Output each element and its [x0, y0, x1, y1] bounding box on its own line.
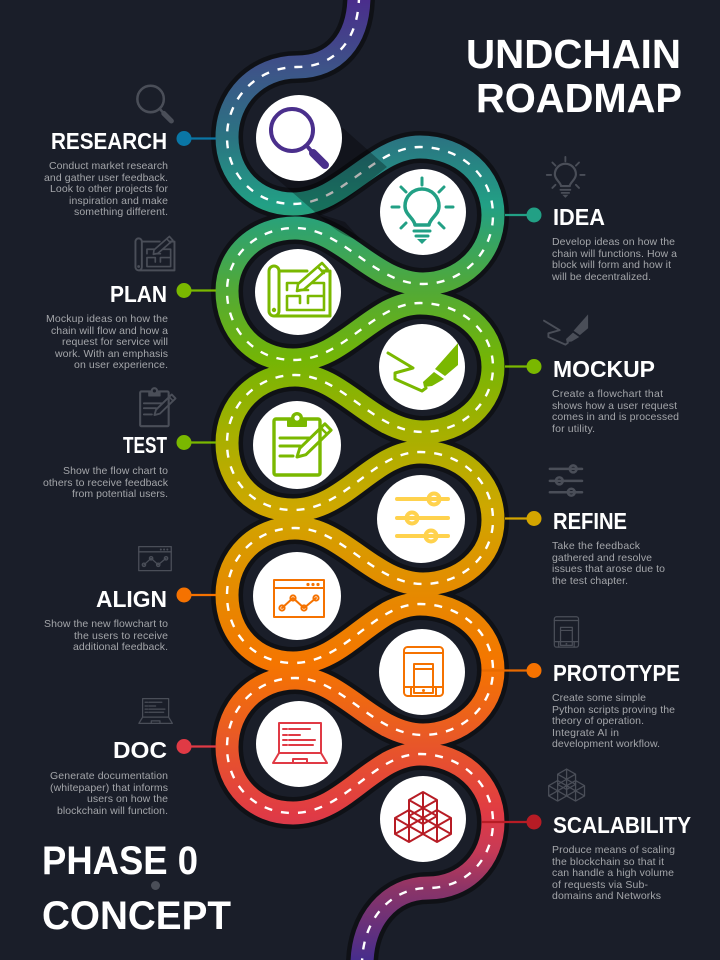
connector: align: [176, 588, 216, 602]
panel: refine: [377, 465, 665, 587]
icon: cubes in circle: [380, 776, 466, 862]
text: plan: Mockup ideas on how the: [46, 313, 168, 325]
text: refine: the test chapter.: [552, 575, 628, 587]
icon: magnifier ghost: [137, 86, 171, 121]
icon: marker ghost: [544, 314, 588, 345]
panel: prototype: [379, 617, 680, 750]
heading: plan: PLAN: [110, 281, 167, 307]
text: scalability: of requests via Sub-: [552, 879, 648, 891]
icon: blueprint ghost: [135, 236, 174, 270]
connector: test: [176, 435, 216, 450]
text: refine: gathered and resolve: [552, 552, 652, 564]
icon: blueprint in circle: [255, 249, 341, 335]
text: doc: [50, 770, 168, 817]
panel: idea: [380, 157, 677, 283]
text: mockup: [552, 388, 679, 435]
text: align: Show the new flowchart to: [44, 618, 168, 630]
text: scalability: [552, 844, 675, 902]
text: research: inspiration and make: [69, 195, 168, 207]
text: mockup: for utility.: [552, 423, 595, 435]
text: prototype: Create some simple: [552, 692, 646, 704]
icon: clipboard in circle: [253, 401, 341, 489]
heading: test: TEST: [123, 432, 167, 458]
text: plan: chain will flow and how a: [51, 325, 168, 337]
text: doc: users on how the: [87, 793, 168, 805]
panel: doc: [50, 699, 342, 817]
text: prototype: development workflow.: [552, 738, 660, 750]
heading: doc: DOC: [113, 737, 167, 763]
panel: scalability: [380, 769, 691, 902]
icon: tablet in circle: [379, 629, 465, 715]
icon: bulb ghost: [547, 157, 585, 198]
icon: sliders in circle: [377, 475, 465, 563]
title: ROADMAP: [476, 75, 682, 121]
text: research: and gather user feedback.: [44, 172, 168, 184]
text: research: Look to other projects for: [50, 183, 168, 195]
text: doc: (whitepaper) that informs: [50, 782, 168, 794]
heading: scalability: SCALABILITY: [553, 812, 691, 838]
icon: bulb in circle: [380, 169, 466, 255]
icon: laptop in circle: [256, 701, 342, 787]
text: scalability: can handle a high volume: [552, 867, 674, 879]
heading: prototype: PROTOTYPE: [553, 660, 680, 686]
title: UNDCHAIN: [466, 31, 681, 77]
text: refine: [552, 540, 665, 587]
text: research: [44, 160, 168, 218]
text: test: from potential users.: [72, 488, 168, 500]
text: plan: request for service will: [62, 336, 168, 348]
text: prototype: Python scripts proving the: [552, 704, 675, 716]
text: idea: block will form and how it: [552, 259, 671, 271]
long shadow of research circle: [270, 128, 387, 240]
heading: research: RESEARCH: [51, 128, 167, 154]
text: doc: Generate documentation: [50, 770, 168, 782]
text: mockup: shows how a user request: [552, 400, 677, 412]
text: refine: Take the feedback: [552, 540, 641, 552]
connector: scalability: [482, 814, 542, 830]
text: doc: blockchain will function.: [57, 805, 168, 817]
connector: mockup: [505, 359, 542, 374]
panel: mockup: [379, 314, 679, 435]
connector: doc: [176, 739, 216, 754]
text: plan: on user experience.: [74, 359, 168, 371]
heading: refine: REFINE: [553, 508, 627, 534]
text: scalability: Produce means of scaling: [552, 844, 675, 856]
panel: test: [43, 387, 341, 500]
connector: prototype: [482, 663, 542, 678]
title: [466, 31, 682, 121]
phase heading: [42, 839, 231, 938]
text: idea: chain will functions. How a: [552, 248, 677, 260]
text: idea: [551, 236, 677, 283]
heading: mockup: MOCKUP: [553, 356, 655, 382]
text: research: Conduct market research: [49, 160, 168, 172]
icon: tablet ghost: [554, 617, 579, 647]
text: prototype: theory of operation.: [552, 715, 644, 727]
text: prototype: [552, 692, 675, 750]
phase heading: PHASE 0: [42, 839, 198, 883]
text: idea: will be decentralized.: [551, 271, 651, 283]
icon: marker in circle: [379, 324, 465, 410]
text: research: something different.: [74, 206, 168, 218]
text: scalability: the blockchain so that it: [552, 856, 664, 868]
text: mockup: comes in and is processed: [552, 411, 679, 423]
panel: plan: [46, 236, 341, 371]
icon: clipboard ghost: [140, 387, 176, 426]
connector: refine: [505, 511, 542, 526]
text: test: Show the flow chart to: [63, 465, 168, 477]
icon: chart window in circle: [253, 552, 341, 640]
text: test: [43, 465, 169, 500]
heading: align: ALIGN: [96, 586, 167, 612]
winding road: [227, 0, 493, 960]
panel: research: [44, 86, 342, 218]
icon: cubes ghost: [549, 769, 585, 801]
text: refine: issues that arose due to: [552, 563, 665, 575]
text: plan: [46, 313, 168, 371]
connector: plan: [176, 283, 216, 298]
text: scalability: domains and Networks: [552, 890, 661, 902]
connector: research: [176, 131, 216, 146]
text: plan: work. With an emphasis: [54, 348, 168, 360]
text: align: [44, 618, 168, 653]
text: test: others to receive feedback: [43, 477, 169, 489]
text: idea: Develop ideas on how the: [552, 236, 675, 248]
text: align: additional feedback.: [73, 641, 168, 653]
connector: idea: [505, 208, 542, 222]
icon: laptop ghost: [139, 699, 172, 723]
heading: idea: IDEA: [553, 204, 605, 230]
panel: align: [44, 547, 341, 653]
text: prototype: Integrate AI in: [552, 727, 619, 739]
text: mockup: Create a flowchart that: [552, 388, 663, 400]
text: align: the users to receive: [74, 630, 168, 642]
icon: magnifier in circle: [256, 95, 342, 181]
icon: chart window ghost: [139, 547, 171, 571]
icon: sliders ghost: [550, 465, 582, 496]
phase heading: CONCEPT: [42, 894, 231, 938]
